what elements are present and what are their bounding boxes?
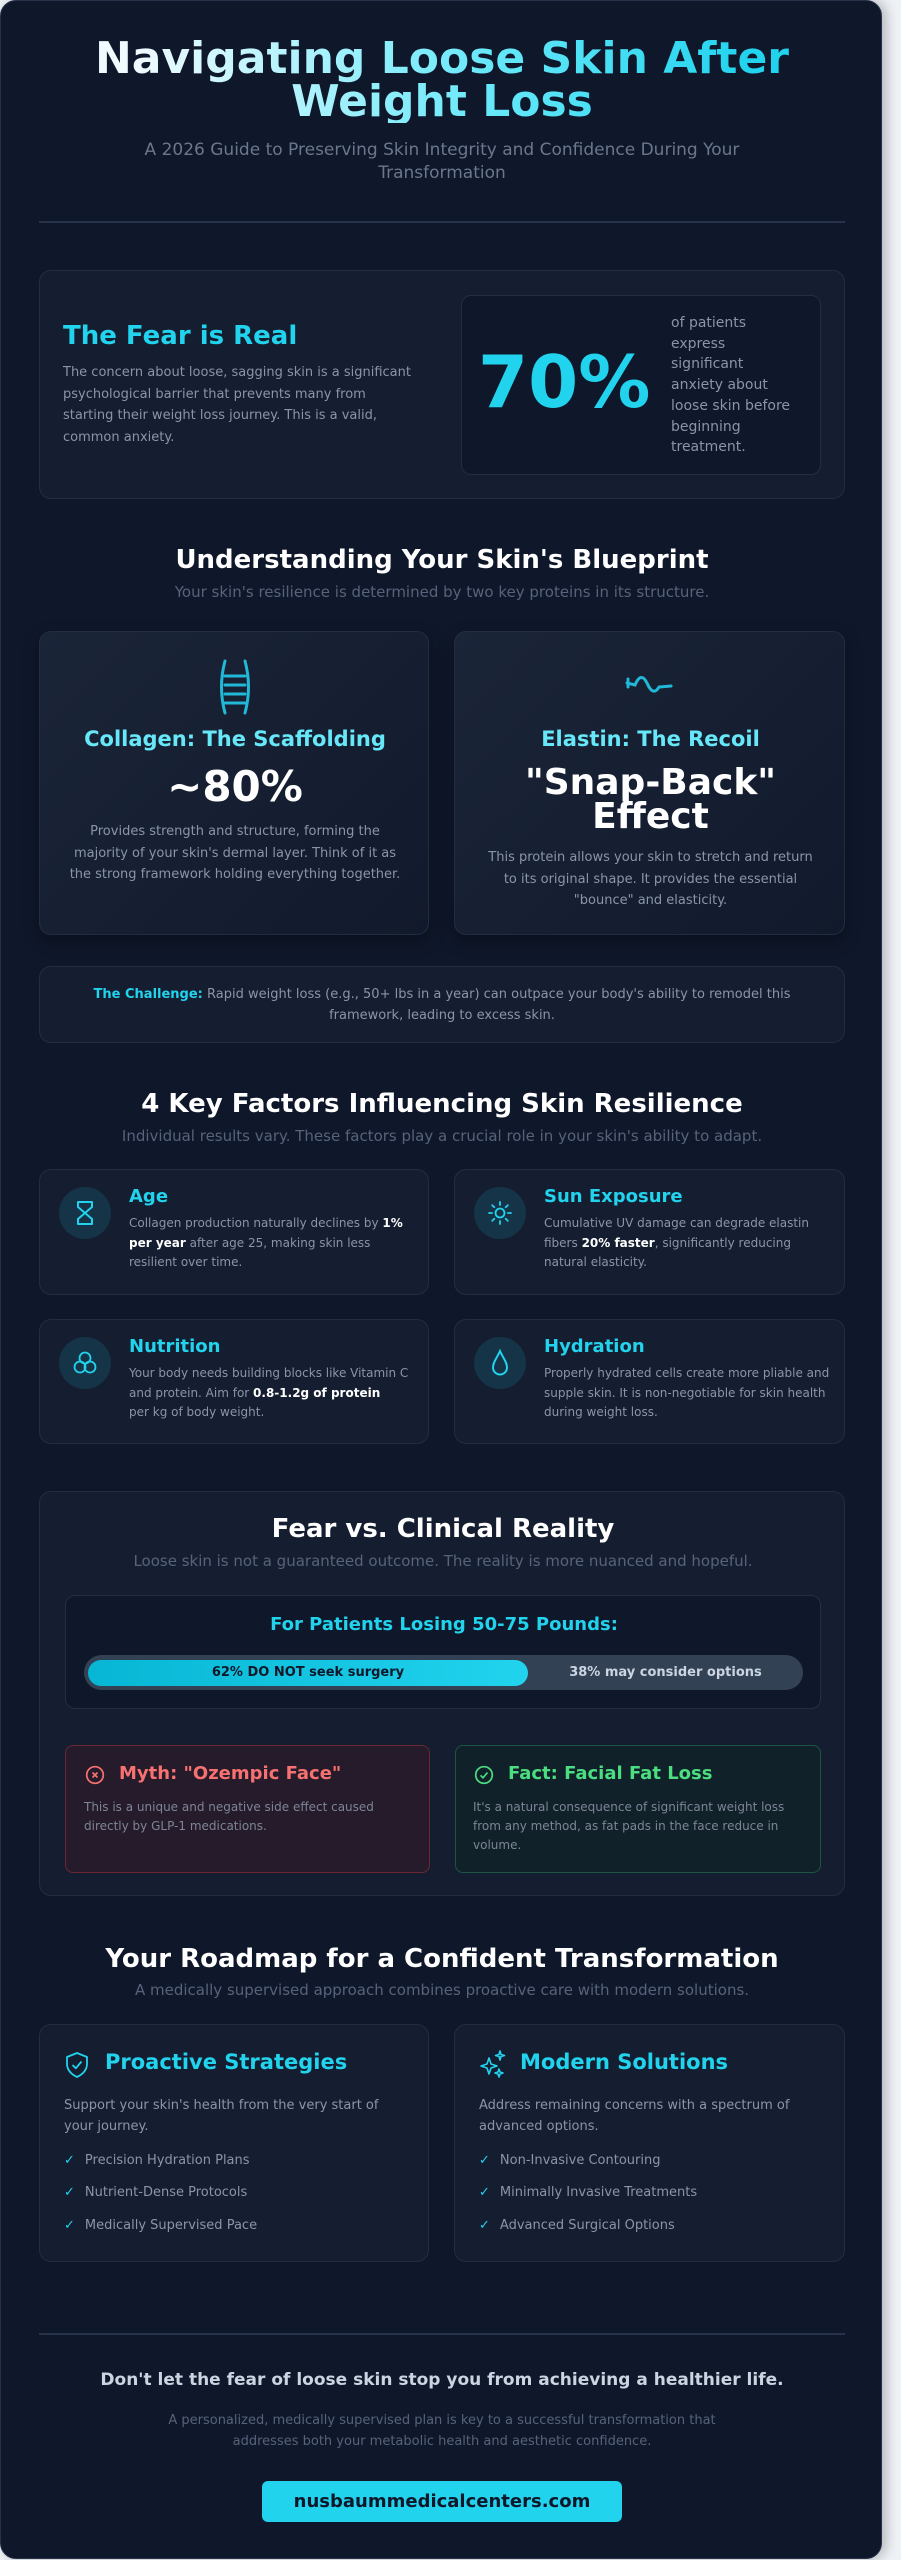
stat number: 70% [478,340,650,424]
list: proactive items [64,2153,257,2233]
title: myth: Myth: "Ozempic Face" [119,1763,341,1784]
title: age: Age [129,1186,168,1207]
button: website: nusbaummedicalcenters.com [294,2491,590,2512]
list: proactive items: ✓ Precision Hydration Plans [64,2153,250,2168]
icon: dna ladder [220,660,250,714]
text: nutrition [129,1366,408,1419]
list: modern items: ✓ Minimally Invasive Treatments [479,2185,697,2200]
text: fear description: The concern about loose, sagging skin is a significant psychological barrier that prevents many from starting their weight loss journey. This is a valid, common anxiety. [63,365,411,445]
panel: modern solutions [454,2024,845,2262]
bar fill: 62%: 62% DO NOT seek surgery [212,1665,404,1680]
text: modern: Address remaining concerns with a spectrum of advanced options. [479,2098,789,2134]
button: website [262,2481,622,2522]
list: modern items: ✓ Advanced Surgical Options [479,2218,675,2233]
title: elastin: Elastin: The Recoil [541,727,760,751]
text: age: Collagen production naturally declines by 1% per year after age 25, making skin less resilient over time. [129,1216,403,1269]
title: collagen: Collagen: The Scaffolding [84,727,386,751]
callout: the challenge: The Challenge: Rapid weight loss (e.g., 50+ lbs in a year) can outpace your body's ability to remodel this framework, leading to excess skin. [94,987,790,1023]
factor card: sun [454,1169,845,1295]
stat: snap-back: "Snap-Back" [525,762,776,803]
text: hydration: Properly hydrated cells create more pliable and supple skin. It is non-negotiable for skin health during weight loss. [544,1366,829,1419]
factor card: age [39,1169,429,1295]
text: proactive: Support your skin's health from the very start of your journey. [64,2098,378,2134]
factor card: nutrition [39,1319,429,1444]
icon: nutrition [59,1337,111,1389]
footer: call to action: Don't let the fear of loose skin stop you from achieving a healthier life. [100,2370,784,2390]
title: Navigating Loose Skin After [95,33,789,84]
panel: collagen [39,631,429,935]
subheading: blueprint: Your skin's resilience is determined by two key proteins in its structure. [175,583,709,601]
chart: surgery stat bar [65,1595,821,1709]
subheading: roadmap: A medically supervised approach combines proactive care with modern solutions. [135,1981,749,1999]
heading: roadmap: Your Roadmap for a Confident Transformation [105,1944,779,1974]
list: modern items [479,2153,697,2233]
bar fill: 62% [88,1660,528,1686]
title: nutrition: Nutrition [129,1336,220,1357]
text: collagen: Provides strength and structure, forming the majority of your skin's dermal layer. Think of it as the strong framework holding everything together. [70,824,400,882]
icon: sparkles [480,2050,506,2078]
title: sun exposure: Sun Exposure [544,1186,683,1207]
text: myth: This is a unique and negative side effect caused directly by GLP-1 medications. [84,1800,374,1833]
card: myth [65,1745,430,1873]
list: modern items: ✓ Non-Invasive Contouring [479,2153,660,2168]
callout: the challenge [39,966,845,1043]
heading: skin blueprint: Understanding Your Skin's Blueprint [175,545,709,575]
heading: 4 key factors: 4 Key Factors Influencing Skin Resilience [141,1089,743,1119]
stat caption: of patients express significant anxiety about loose skin before beginning treatment. [671,315,790,455]
bar label: 38%: 38% may consider options [569,1665,762,1680]
title: fact: Fact: Facial Fat Loss [508,1763,712,1784]
list: proactive items: ✓ Medically Supervised Pace [64,2218,257,2233]
text: sun: Cumulative UV damage can degrade elastin fibers 20% faster, significantly reducing natural elasticity. [544,1216,809,1269]
subheading: factors: Individual results vary. These factors play a crucial role in your skin's ability to adapt. [122,1127,762,1145]
subtitle: A 2026 Guide to Preserving Skin Integrity and Confidence During Your Transformation [145,140,739,183]
icon: x circle [86,1766,104,1784]
footer: text: A personalized, medically supervised plan is key to a successful transformation that addresses both your metabolic health and aesthetic confidence. [168,2413,716,2449]
title: proactive: Proactive Strategies [105,2050,347,2074]
icon: shield check [66,2052,88,2078]
title: hydration: Hydration [544,1336,645,1357]
heading: fear is real: The Fear is Real [63,321,297,351]
bar [84,1655,803,1690]
panel: fear is real [39,270,845,499]
title: modern: Modern Solutions [520,2050,728,2074]
icon: check circle [474,1766,494,1784]
panel: fear vs clinical reality [39,1491,845,1896]
heading: fear vs reality: Fear vs. Clinical Reality [272,1514,614,1544]
icon: sun [474,1187,526,1239]
text: elastin: This protein allows your skin to stretch and return to its original shape. It provides the essential "bounce" and elasticity. [488,850,813,908]
icon: hourglass [59,1187,111,1239]
title [1,37,883,123]
factor card: hydration [454,1319,845,1444]
panel: elastin [454,631,845,935]
stat: snap-back [525,762,776,837]
text: fact: It's a natural consequence of significant weight loss from any method, as fat pads in the face reduce in volume. [473,1800,784,1852]
stat: snap-back: Effect [592,796,709,837]
card: fact [455,1745,821,1873]
chart title: For Patients Losing 50-75 Pounds: [270,1614,618,1635]
text: nutrition: Your body needs building blocks like Vitamin C and protein. Aim for 0.8-1.2g of protein [129,1366,408,1400]
title: Weight Loss [291,76,593,127]
list: proactive items: ✓ Nutrient-Dense Protocols [64,2185,247,2200]
panel: proactive strategies [39,2024,429,2262]
text: nutrition: per kg of body weight. [129,1405,264,1419]
icon: wave [626,676,672,693]
subheading: reality: Loose skin is not a guaranteed outcome. The reality is more nuanced and hopeful. [133,1552,753,1570]
stat box: 70% [461,295,821,475]
stat: 80%: ~80% [167,762,303,811]
icon: droplet [474,1337,526,1389]
